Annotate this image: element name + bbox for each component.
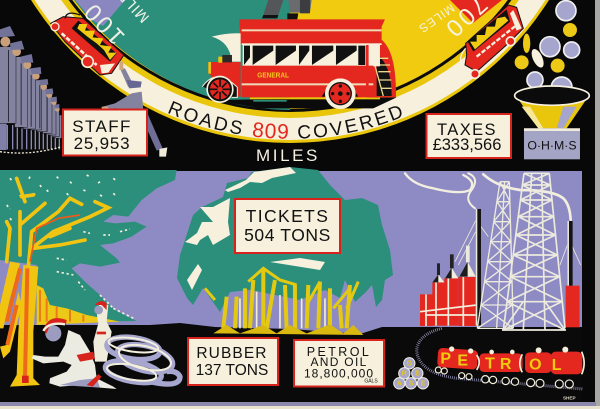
tank train: O: [529, 356, 542, 373]
tank train: T: [485, 355, 495, 372]
banyan tree canopy: [177, 167, 393, 312]
staff heads: [0, 26, 60, 112]
tickets figure box: TICKETS: [246, 206, 329, 226]
standing woman: [93, 301, 112, 362]
rubber tree trunks: [0, 262, 40, 387]
miles caption: MILES: [256, 146, 320, 165]
latex cup: [22, 376, 29, 383]
petrol figure box: [294, 340, 384, 386]
small derrick: [477, 182, 513, 328]
petrol figure box: AND OIL: [310, 355, 368, 369]
rubber figure box: RUBBER: [196, 345, 268, 362]
tapper and tyres: [22, 301, 180, 389]
small bus right: [461, 5, 523, 78]
OHMS box: [524, 128, 580, 159]
refinery: [420, 209, 580, 327]
rubber tree: [0, 170, 177, 387]
staff coats: [0, 47, 62, 138]
bus upper deck: [239, 19, 385, 45]
grease drums: G: [407, 361, 412, 368]
tank train: R: [500, 356, 512, 373]
funnel: [514, 86, 589, 128]
tank train: P: [440, 350, 451, 367]
oil field: [394, 173, 584, 400]
grease drums: E: [415, 371, 420, 378]
rubber tree canopy: [0, 170, 177, 322]
OHMS box: O·H·M·S: [527, 138, 577, 152]
tyres: [104, 334, 180, 386]
conductor pushing bus: [102, 62, 167, 157]
railway track: [417, 328, 583, 389]
petrol figure box: GALS: [364, 378, 378, 384]
tank train: L: [552, 357, 562, 374]
smoke: [405, 173, 571, 220]
kneeling man: [32, 318, 117, 389]
bus front wheel: [202, 76, 237, 103]
grease drums: S: [409, 381, 414, 388]
fleet name: GENERAL: [257, 73, 290, 80]
taxes figure box: TAXES: [437, 121, 497, 139]
bus windows: [243, 44, 380, 66]
rubber tree branches: [7, 178, 108, 267]
bus rear wheel: [322, 78, 358, 109]
artist signature: SHEP: [563, 395, 576, 400]
taxes figure box: £333,566: [433, 136, 501, 154]
bus rear stairs: [367, 38, 396, 97]
mileage dial: [0, 0, 596, 143]
lower panel sky: [0, 171, 582, 336]
dial label: 700 miles: MILES: [416, 1, 457, 36]
bus lower deck: [242, 45, 373, 97]
petrol figure box: 18,800,000: [304, 366, 374, 380]
main bus: [202, 19, 397, 109]
tickets figure box: [235, 199, 340, 253]
banyan highlights: [185, 167, 325, 290]
grease drums: R: [402, 371, 407, 378]
tickets figure box: 504 TONS: [244, 225, 331, 245]
banyan roots: [205, 268, 363, 335]
grease drums: E: [421, 381, 426, 388]
rubber figure box: [188, 338, 278, 385]
staff line-up: [0, 26, 167, 157]
staff legs: [0, 123, 62, 153]
small bus left: [51, 13, 124, 75]
hanging yellow roots: [37, 285, 120, 325]
coins: [515, 1, 580, 98]
coins and tax funnel: [514, 1, 589, 159]
ground: [0, 323, 582, 400]
road distance label: ROADS 809 COVERED: [168, 101, 402, 139]
grease drums: [394, 358, 429, 389]
bus bonnet: [208, 33, 241, 97]
canopy highlights: [7, 175, 133, 318]
figure above bus: [262, 0, 312, 19]
staff figure box: STAFF: [72, 117, 132, 136]
large derrick: [502, 173, 566, 330]
tank train: [435, 346, 584, 388]
grease drums: A: [397, 381, 402, 388]
taxes figure box: [426, 114, 511, 158]
bus shadow and chassis: [213, 97, 397, 108]
guy wires: [455, 220, 581, 265]
staff figure box: [63, 110, 147, 156]
petrol figure box: PETROL: [307, 345, 371, 359]
tank train: E: [457, 353, 468, 370]
staff figure box: 25,953: [74, 134, 130, 153]
rubber figure box: 137 TONS: [196, 362, 268, 379]
